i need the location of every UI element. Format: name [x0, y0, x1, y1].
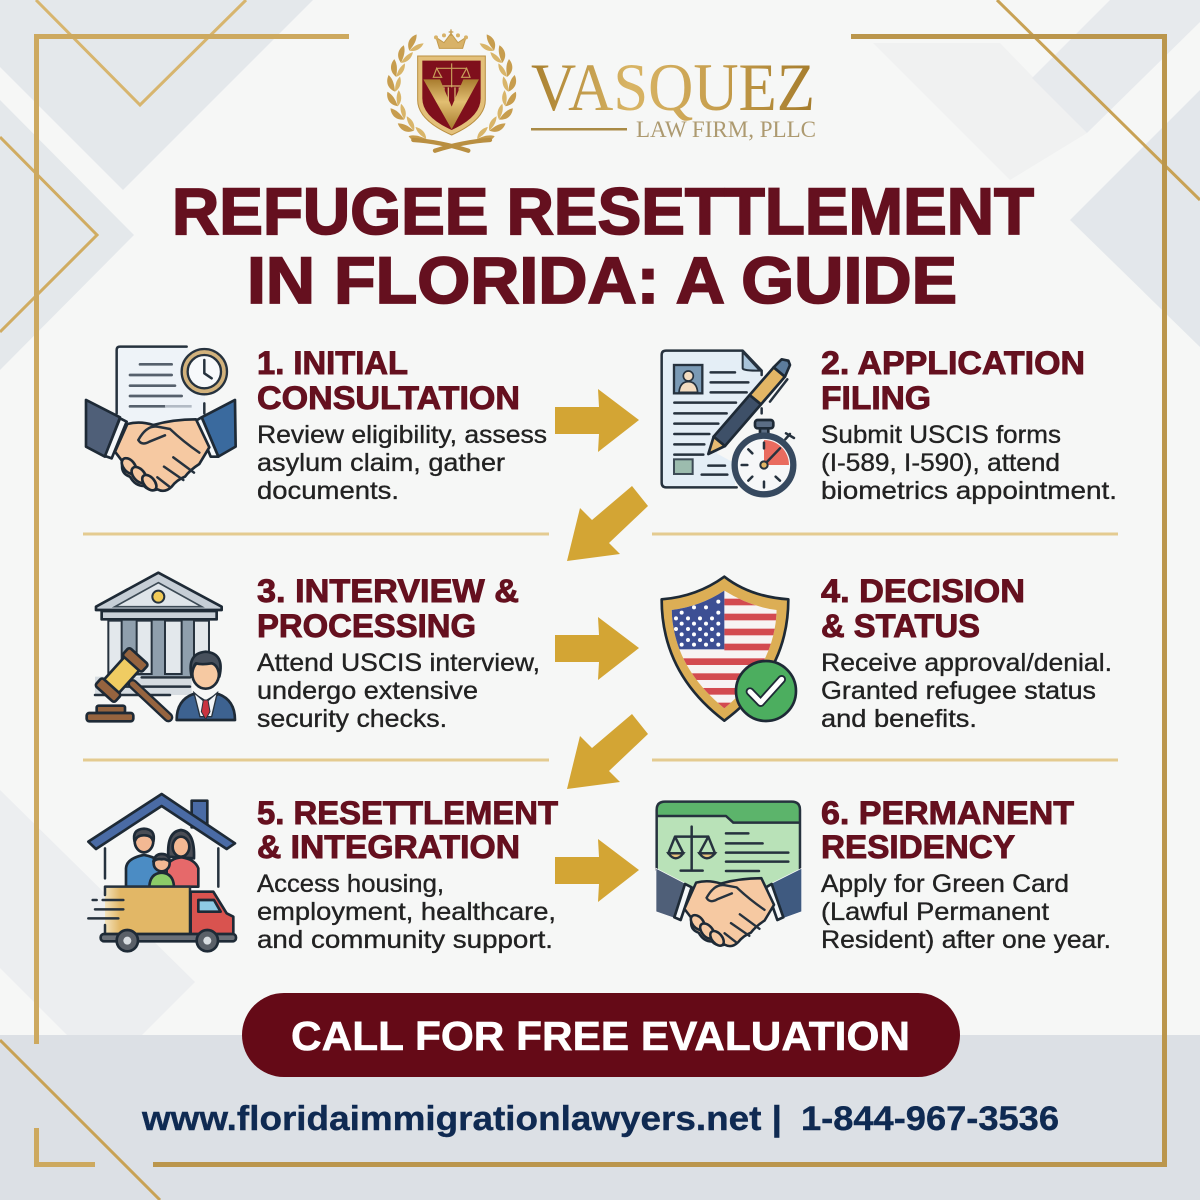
step 3 description: security checks.	[257, 705, 447, 733]
logo	[386, 29, 816, 151]
step 5 heading: 5. RESETTLEMENT	[257, 795, 558, 831]
icon: family in house with moving truck	[88, 794, 236, 951]
contact line: www.floridaimmigrationlawyers.net |	[141, 1100, 782, 1138]
step 1 heading	[257, 345, 520, 416]
step 2 description: biometrics appointment.	[821, 477, 1117, 505]
step 2 heading: FILING	[821, 380, 931, 416]
arrow: step 5 to 6	[555, 839, 639, 902]
step 1 description	[257, 421, 547, 505]
step 3 description	[257, 649, 540, 733]
step 5 description	[257, 870, 556, 954]
step 1 heading: CONSULTATION	[257, 380, 520, 416]
step 2 description: Submit USCIS forms	[821, 421, 1061, 449]
step 6 description: Resident) after one year.	[821, 926, 1111, 954]
step 6 description: (Lawful Permanent	[821, 898, 1049, 926]
step 2 description: (I-589, I-590), attend	[821, 449, 1060, 477]
step 1 heading: 1. INITIAL	[257, 345, 408, 381]
step 3 heading: PROCESSING	[257, 608, 476, 644]
divider row 1	[83, 532, 1118, 536]
step 5 description: employment, healthcare,	[257, 898, 556, 926]
icon: courthouse, gavel and lawyer	[87, 573, 235, 721]
panel: step 2	[662, 345, 1117, 505]
step 3 description: Attend USCIS interview,	[257, 649, 540, 677]
icon: handshake with document and clock	[86, 347, 236, 493]
step 5 description: Access housing,	[257, 870, 444, 898]
panel: step 3	[87, 573, 540, 733]
step 1 description: documents.	[257, 477, 399, 505]
step 4 heading	[821, 573, 1025, 644]
step 1 description: Review eligibility, assess	[257, 421, 547, 449]
step 5 heading: & INTEGRATION	[257, 829, 520, 865]
divider row 2	[83, 758, 1118, 762]
title	[172, 174, 1034, 317]
step 3 heading: 3. INTERVIEW &	[257, 573, 519, 609]
step 6 description: Apply for Green Card	[821, 870, 1069, 898]
step 6 heading: 6. PERMANENT	[821, 795, 1074, 831]
step 2 description	[821, 421, 1117, 505]
emblem: shield, wreath and crown	[386, 29, 517, 151]
step 5 description: and community support.	[257, 926, 553, 954]
step 2 heading: 2. APPLICATION	[821, 345, 1085, 381]
icon: green card folder and handshake	[656, 802, 802, 948]
step 4 description: Receive approval/denial.	[821, 649, 1112, 677]
logo rule	[531, 128, 627, 130]
arrow: step 3 to 4	[555, 617, 639, 680]
contact line	[141, 1100, 1059, 1138]
step 4 heading: 4. DECISION	[821, 573, 1025, 609]
arrow: step 1 to 2	[555, 389, 639, 452]
firm subtitle: LAW FIRM, PLLC	[636, 117, 816, 142]
panel: step 4	[662, 573, 1112, 733]
icon: application form, pen and stopwatch	[662, 351, 794, 494]
panel: step 6	[656, 795, 1111, 954]
step 4 description: Granted refugee status	[821, 677, 1096, 705]
step 4 description	[821, 649, 1112, 733]
firm name: VASQUEZ	[531, 49, 815, 125]
step 3 heading	[257, 573, 519, 644]
step 6 heading: RESIDENCY	[821, 829, 1015, 865]
icon: American flag shield with check mark	[662, 577, 796, 721]
step 2 heading	[821, 345, 1085, 416]
step 1 description: asylum claim, gather	[257, 449, 505, 477]
call to action button: CALL FOR FREE EVALUATION	[291, 1013, 910, 1059]
step 5 heading	[257, 795, 558, 865]
title: IN FLORIDA: A GUIDE	[247, 243, 957, 317]
arrow: step 4 to 5	[567, 714, 648, 789]
step 4 description: and benefits.	[821, 705, 977, 733]
step 6 heading	[821, 795, 1074, 865]
contact line: 1-844-967-3536	[801, 1100, 1059, 1138]
step 3 description: undergo extensive	[257, 677, 478, 705]
panel: step 5	[88, 794, 558, 954]
panel: step 1	[86, 345, 547, 505]
step 4 heading: & STATUS	[821, 608, 980, 644]
step 6 description	[821, 870, 1111, 954]
title: REFUGEE RESETTLEMENT	[172, 174, 1034, 248]
call to action button	[242, 993, 960, 1077]
arrow: step 2 to 3	[567, 486, 648, 561]
